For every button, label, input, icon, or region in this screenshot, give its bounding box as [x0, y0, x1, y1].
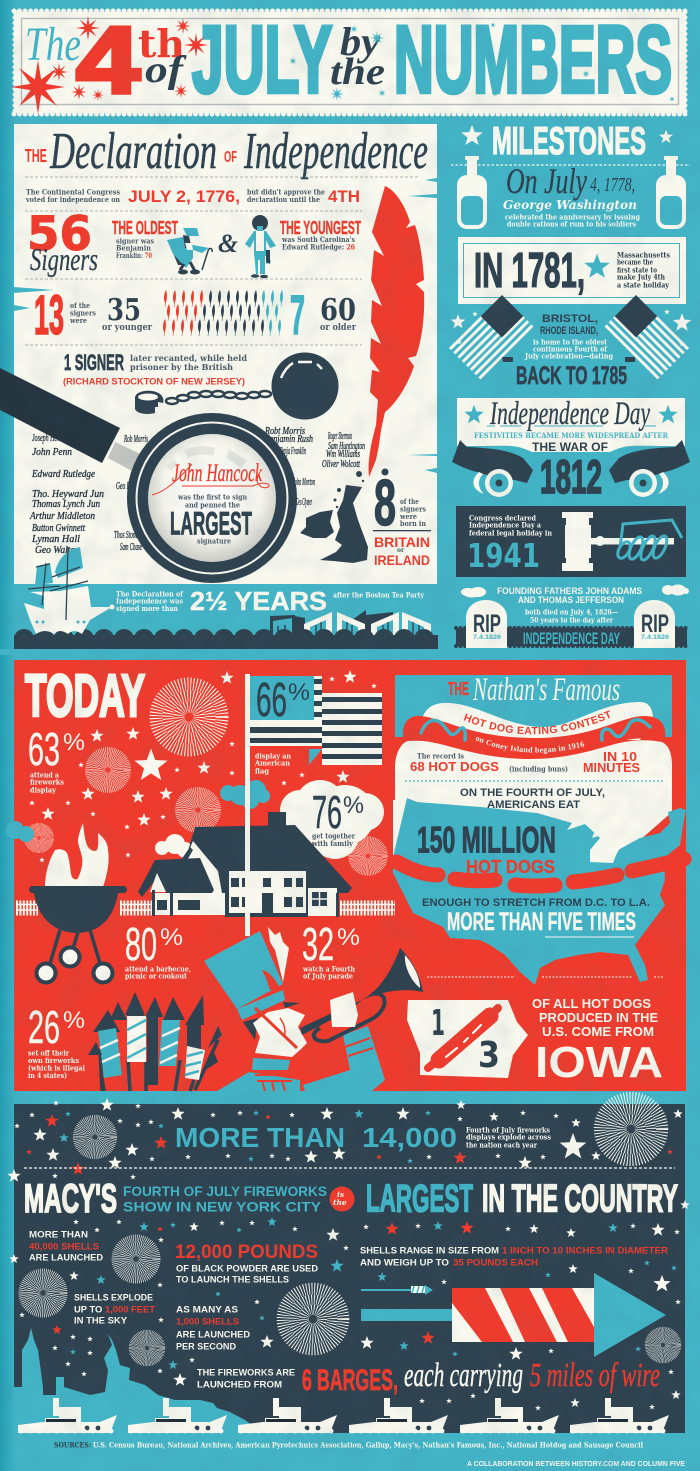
signature: john hancock: [152, 460, 269, 495]
stat: more than 14000: MORE THAN: [175, 1122, 345, 1153]
icon: american flag with 66 percent: display an: [255, 752, 291, 760]
milestone: war of 1812: 1812: [540, 450, 602, 503]
title: by: [340, 19, 380, 64]
milestone: adams and jefferson: [456, 584, 689, 648]
icon: tombstones: [466, 600, 675, 648]
milestone: 1941 legal holiday: [456, 506, 686, 577]
milestone: 1778 george washington: 4, 1778,: [590, 174, 635, 196]
header banner: [11, 7, 686, 114]
icon: ship: [24, 547, 114, 634]
text: 1 signer recanted: prisoner by the British: [130, 363, 233, 373]
dotted divider and record: 68 HOT DOGS: [410, 760, 499, 774]
text: the youngest: THE YOUNGEST: [280, 218, 361, 238]
text: americans eat: AMERICANS EAT: [487, 799, 580, 811]
text: iowa: IOWA: [535, 1038, 663, 1087]
text: barges: LAUNCHED FROM: [197, 1380, 282, 1390]
sources: U.S. Census Bureau, National Archives, American Pyrotechnics Association, Gallup, Macy's, Nathan's Famous, Inc., National Hotdog and Sausage Council: [93, 1440, 643, 1450]
stat: 32 percent parade: 32: [302, 918, 334, 970]
stat: 26 percent own fireworks: set off their: [28, 1048, 70, 1058]
signature: john hancock: John Hancock: [172, 460, 263, 487]
icon: cream cloud with 76 percent: %: [343, 792, 364, 819]
heading: declaration: THE: [25, 146, 47, 166]
icon: tombstones: RIP: [641, 610, 669, 638]
heading: declaration: Independence: [243, 123, 428, 180]
icon: american flag with 66 percent: [245, 674, 382, 936]
stat: 7 signers 60 or older: or older: [320, 323, 356, 333]
text: the oldest: [112, 218, 178, 260]
text: the youngest: was South Carolina's: [281, 235, 355, 244]
stat: 8 signers born in britain or ireland: or: [397, 547, 405, 554]
icon: american flag with 66 percent: American: [254, 758, 290, 768]
signatures: Geo Read: [116, 481, 139, 492]
text: continental congress: [25, 187, 360, 206]
milestone: war of 1812: THE WAR OF: [532, 440, 608, 454]
text: declaration signed: Independence was: [116, 596, 183, 606]
cream field and us map: [393, 740, 686, 985]
icon: american flag with 66 percent: %: [288, 679, 310, 706]
icon: american flag with 66 percent: flag: [255, 766, 270, 776]
text: enough to stretch: [422, 897, 650, 938]
icon: barbecue grill: [29, 823, 127, 982]
text: barges: THE FIREWORKS ARE: [197, 1368, 295, 1378]
text: barges: [197, 1357, 660, 1397]
text: barges: 6 BARGES,: [302, 1364, 398, 1397]
stat: more than 14000: displays explode across: [466, 1132, 551, 1142]
text: 1000 shells per second: ARE LAUNCHED: [176, 1330, 251, 1340]
text: the youngest: Edward Rutledge: 26: [282, 242, 355, 252]
signatures: Button Gwinnett: [32, 523, 85, 534]
text: founding fathers: 50 years to the day after: [530, 616, 614, 624]
waves: [0, 635, 438, 655]
milestone: 1778 george washington: George Washington: [503, 198, 637, 212]
milestone: bristol flags: RHODE ISLAND,: [540, 325, 598, 337]
signatures: [29, 426, 365, 556]
text: continental congress: voted for independence on: [25, 195, 120, 204]
signatures: Wm Williams: [326, 449, 360, 460]
icon: cannons: [452, 440, 690, 497]
waves: [260, 1433, 686, 1441]
text: first to sign: signature: [197, 536, 231, 546]
stat: 8 signers born in britain or ireland: IRELAND: [374, 552, 430, 568]
stat: 56 signers: 56: [27, 207, 92, 262]
text: founding fathers: AND THOMAS JEFFERSON: [518, 595, 624, 605]
text: 40000 shells: ARE LAUNCHED: [29, 1252, 104, 1262]
heading: macy's largest in the country: SHOW IN NEW YORK CITY: [123, 1198, 322, 1214]
text: 12000 pounds: [175, 1242, 319, 1284]
signatures: Thomas Lynch Jun: [32, 499, 100, 510]
milestone: 1778 george washington: double rations of rum to his soldiers: [507, 220, 636, 228]
text: declaration signed: after the Boston Tea Party: [333, 590, 425, 600]
text: 1000 shells per second: 1,000 SHELLS: [176, 1316, 239, 1326]
text: americans eat: [417, 787, 605, 860]
credit: A COLLABORATION BETWEEN HISTORY.COM AND COLUMN FIVE: [467, 1461, 685, 1468]
signatures: Roger Sherman: [328, 431, 352, 442]
heading: nathan's famous: Nathan's Famous: [472, 672, 620, 708]
icon: rockets: [88, 992, 222, 1091]
text: the oldest: THE OLDEST: [112, 218, 178, 238]
text: declaration signed: [116, 586, 425, 616]
heading: macy's largest in the country: LARGEST: [366, 1178, 473, 1220]
signatures: Tho. Heyward Jun: [32, 489, 104, 500]
signatures: Benja Franklin: [280, 446, 306, 457]
icon: ball and chain: [135, 352, 338, 420]
panel: nathan's famous: [393, 672, 692, 1087]
dotted divider and record: [405, 750, 665, 781]
banner: hot dog eating contest: on Coney Island began in 1916: [476, 737, 584, 754]
milestone: 1778 george washington: On July: [506, 161, 587, 201]
banner: hot dog eating contest: [403, 702, 666, 754]
title stars: [11, 16, 675, 114]
heading: nathan's famous: [448, 672, 620, 708]
text: shells explode: SHELLS EXPLODE: [74, 1292, 153, 1302]
stat: 13 signers 35 or younger: [34, 283, 152, 346]
text: americans eat: ON THE FOURTH OF JULY,: [460, 787, 605, 799]
stat: 8 signers born in britain or ireland: born in: [400, 519, 426, 528]
signatures: Thos Stone: [114, 530, 138, 541]
panel: today: [6, 660, 692, 1092]
text: first to sign: and penned the: [185, 500, 240, 510]
text: 1 signer recanted: 1 SIGNER: [64, 350, 124, 375]
signatures: Benja Rush: [122, 456, 146, 467]
milestone: bristol flags: [449, 295, 691, 390]
signatures: Rob Morris: [123, 434, 148, 445]
icon: cream cloud with 76 percent: 76: [312, 786, 342, 838]
stat: 13 signers 35 or younger: 35: [107, 293, 141, 328]
text: first to sign: LARGEST: [170, 506, 252, 542]
stat: 13 signers 35 or younger: or younger: [102, 323, 152, 333]
text: barges: each carrying: [404, 1357, 523, 1394]
signatures: Sam Huntington: [328, 441, 365, 452]
icon: benjamin franklin figure: [167, 228, 212, 274]
heading: macy's largest in the country: is: [337, 1190, 345, 1199]
stat: 8 signers born in britain or ireland: signers: [400, 504, 426, 514]
stat: 32 percent parade: %: [337, 924, 360, 951]
milestone: bristol flags: continuous Fourth of: [533, 344, 608, 354]
icon: house: [138, 812, 352, 917]
stat: 56 signers: Signers: [30, 241, 98, 277]
heading: declaration: OF: [224, 149, 237, 166]
sources: SOURCES:: [54, 1440, 91, 1450]
stat: 63 percent fireworks display: [28, 723, 85, 794]
icon: tombstones: 7.4.1826: [641, 635, 670, 641]
stat: 80 percent barbecue: 80: [125, 918, 157, 970]
icon: iowa state with 1 in 3 hot dog: 1: [431, 1003, 445, 1044]
text: 12000 pounds: TO LAUNCH THE SHELLS: [176, 1274, 289, 1284]
milestone: 1781 massachusetts: Massachusetts: [617, 250, 670, 260]
stat: 80 percent barbecue: attend a barbecue,: [125, 964, 191, 974]
icon: cream cloud with 76 percent: get together: [312, 832, 356, 840]
stat: 8 signers born in britain or ireland: were: [399, 512, 417, 521]
signatures: Sam Chase: [120, 542, 142, 553]
signatures: Joseph Hewes: [32, 433, 66, 444]
stars: [7, 1098, 690, 1410]
text: the oldest: Benjamin: [116, 244, 151, 252]
stat: more than 14000: [175, 1122, 551, 1153]
text: iowa: U.S. COME FROM: [542, 1025, 654, 1039]
milestone: 1941 legal holiday: Congress declared: [469, 514, 537, 522]
stat: 8 signers born in britain or ireland: 8: [374, 466, 396, 539]
title: the: [330, 51, 385, 93]
heading: nathan's famous: THE: [448, 679, 469, 699]
text: continental congress: but didn't approve the: [247, 188, 325, 196]
text: shell sizes: 35 POUNDS EACH: [453, 1258, 538, 1268]
stat: 13 signers 35 or younger: were: [69, 316, 87, 325]
dotted divider and record: The record is: [417, 752, 464, 760]
text: shell sizes: 1 INCH TO 10 INCHES IN DIAMETER: [502, 1246, 669, 1256]
text: enough to stretch: ENOUGH TO STRETCH FROM D.C. TO L.A.: [422, 897, 650, 909]
milestone: 1781 massachusetts: first state to: [617, 266, 657, 274]
icon: trumpet player: [204, 927, 423, 1091]
milestone: 1781 massachusetts: make July 4th: [617, 272, 665, 282]
signatures: Geo Walton: [35, 545, 80, 556]
milestone: war of 1812: FESTIVITIES BECAME MORE WIDESPREAD AFTER: [474, 431, 668, 440]
title: [25, 7, 672, 114]
text: shells explode: [74, 1292, 156, 1326]
stat: 26 percent own fireworks: in 4 states): [28, 1071, 67, 1080]
ampersand: &: [218, 229, 238, 258]
text: shells explode: UP TO 1,000 FEET: [74, 1304, 156, 1314]
icon: barges: [18, 1398, 669, 1433]
stat: 63 percent fireworks display: display: [30, 786, 57, 794]
icon: cream cloud with 76 percent: [278, 780, 384, 859]
stat: 26 percent own fireworks: %: [63, 1007, 85, 1034]
milestone: bristol flags: BACK TO 1785: [516, 362, 627, 390]
dotted divider and record: MINUTES: [583, 761, 640, 775]
text: 1000 shells per second: AS MANY AS: [176, 1304, 238, 1314]
text: 1000 shells per second: PER SECOND: [176, 1342, 236, 1352]
fireworks bursts: [23, 1098, 678, 1363]
icon: ink drops: [356, 468, 388, 477]
heading: macy's largest in the country: [24, 1177, 678, 1221]
icon: magnifying glass: [127, 413, 297, 583]
dotted divider and record: (including buns): [509, 764, 568, 774]
text: shells explode: IN THE SKY: [74, 1316, 127, 1326]
icon: iowa state with 1 in 3 hot dog: 3: [478, 1035, 500, 1076]
stat: 80 percent barbecue: [125, 918, 191, 980]
band: independence day ribbon: INDEPENDENCE DAY: [523, 630, 620, 648]
icon: harbor buildings: [270, 610, 431, 635]
text: the youngest: [280, 218, 361, 252]
band: independence day ribbon: [456, 628, 687, 648]
icon: small and large rockets: [361, 1273, 666, 1357]
icon: rum bottles: [457, 156, 686, 229]
icon: gavel and hand: [562, 512, 682, 571]
heading: macy's largest in the country: MACY'S: [24, 1177, 117, 1221]
text: 40000 shells: 40,000 SHELLS: [29, 1242, 99, 1252]
chart: quill pictogram of signers by age: [163, 290, 283, 336]
text: declaration signed: 2½ YEARS: [190, 586, 327, 616]
signatures: Arthur Middleton: [29, 511, 95, 522]
banner: hot dog eating contest: HOT DOG EATING CONTEST: [464, 710, 610, 734]
text: founding fathers: both died on July 4, 1826—: [525, 608, 618, 616]
text: the oldest: Franklin: 70: [116, 251, 152, 260]
text: continental congress: 4TH: [328, 187, 360, 206]
text: 40000 shells: MORE THAN: [29, 1230, 88, 1240]
milestone: 1778 george washington: [503, 161, 641, 228]
stat: 8 signers born in britain or ireland: of the: [400, 497, 419, 506]
text: shell sizes: SHELLS RANGE IN SIZE FROM: [360, 1246, 499, 1256]
title: 4: [76, 8, 140, 114]
stat: 13 signers 35 or younger: 13: [34, 283, 64, 346]
stat: 32 percent parade: of July parade: [303, 972, 353, 980]
signatures: Geo Clymer: [296, 497, 312, 508]
text: declaration signed: signed more than: [116, 604, 178, 613]
text: americans eat: 150 MILLION: [417, 820, 556, 860]
stat: 7 signers 60 or older: 7: [290, 283, 305, 346]
text: 12000 pounds: 12,000 POUNDS: [175, 1242, 318, 1263]
panel: declaration of independence: [0, 123, 437, 584]
icon: sausage chain: [397, 859, 684, 886]
milestone: 1941 legal holiday: federal legal holiday in: [469, 528, 552, 538]
milestone: bristol flags: July celebration—dating: [524, 352, 614, 360]
milestone: 1781 massachusetts: [458, 237, 686, 304]
text: 1 signer recanted: [63, 350, 247, 388]
milestone: 1781 massachusetts: became the: [617, 258, 653, 266]
icon: american flag with 66 percent: 66: [256, 674, 287, 727]
stat: 7 signers 60 or older: [290, 283, 356, 346]
stat: more than 14000: Fourth of July fireworks: [466, 1126, 550, 1134]
stat: 13 signers 35 or younger: signers: [70, 308, 96, 318]
stat: 8 signers born in britain or ireland: [373, 466, 431, 568]
text: 40000 shells: [29, 1230, 104, 1262]
icon: clouds: [461, 584, 689, 598]
dotted divider and record: IN 10: [603, 750, 637, 764]
stat: 26 percent own fireworks: own fireworks: [28, 1056, 79, 1065]
milestone: bristol flags: is home to the oldest: [533, 338, 607, 346]
signatures: Lyman Hall: [31, 534, 80, 545]
text: shell sizes: [360, 1246, 669, 1268]
stat: 26 percent own fireworks: [28, 1001, 85, 1080]
text: continental congress: The Continental Congress: [26, 188, 120, 196]
text: shell sizes: AND WEIGH UP TO: [360, 1258, 449, 1268]
heading: today: TODAY: [25, 663, 145, 729]
signatures: Edward Rutledge: [31, 469, 96, 480]
icon: iowa state with 1 in 3 hot dog: [407, 1000, 528, 1078]
text: iowa: [532, 997, 663, 1087]
text: iowa: OF ALL HOT DOGS: [532, 997, 651, 1011]
text: iowa: PRODUCED IN THE: [539, 1011, 658, 1025]
text: founding fathers: [497, 586, 642, 624]
icon: cream cloud with 76 percent: with family: [311, 839, 354, 848]
icon: tombstones: 7.4.1826: [473, 635, 502, 641]
panel: fireworks night sky: [7, 1098, 690, 1445]
icon: quill feather: [369, 186, 424, 477]
milestone: 1781 massachusetts: IN 1781,: [474, 244, 585, 298]
signatures: John Morton: [293, 477, 315, 488]
text: the oldest: signer was: [116, 236, 154, 246]
signatures: Benjamin Rush: [265, 434, 313, 445]
milestone: 1941 legal holiday: 1941: [467, 536, 540, 575]
stat: 32 percent parade: watch a Fourth: [302, 964, 355, 974]
text: 1 signer recanted: (RICHARD STOCKTON OF NEW JERSEY): [63, 376, 245, 388]
milestone: war of 1812: [452, 396, 690, 503]
milestone: 1781 massachusetts: a state holiday: [617, 280, 670, 290]
heading: declaration: Declaration: [49, 123, 217, 180]
band: boston tea party: [0, 547, 438, 655]
signatures: Robt Morris: [264, 426, 305, 437]
stat: 63 percent fireworks display: %: [63, 729, 85, 756]
title: of: [145, 49, 187, 91]
heading: declaration: [25, 123, 428, 180]
text: 1 signer recanted: later recanted, while held: [130, 354, 247, 364]
stat: 63 percent fireworks display: fireworks: [30, 778, 64, 786]
text: continental congress: declaration until the: [247, 195, 320, 204]
text: first to sign: was the first to sign: [177, 492, 247, 502]
heading: macy's largest in the country: FOURTH OF JULY FIREWORKS: [123, 1183, 327, 1199]
stars and fireworks background: [26, 670, 377, 862]
text: declaration signed: The Declaration of: [116, 590, 184, 598]
text: 12000 pounds: OF BLACK POWDER ARE USED: [176, 1264, 319, 1274]
icon: sleeve and magnifier handle: [0, 368, 145, 474]
map: britain and ireland: [300, 480, 368, 563]
icon: new york skyline: [14, 1328, 263, 1445]
teal cloud: [6, 780, 270, 842]
heading: macy's largest in the country: the: [333, 1198, 347, 1207]
stat: 13 signers 35 or younger: of the: [70, 301, 90, 310]
signatures: John Penn: [32, 447, 72, 458]
text: hot dogs: HOT DOGS: [466, 857, 555, 877]
text: founding fathers: FOUNDING FATHERS JOHN ADAMS: [497, 586, 642, 596]
text: first to sign: [170, 492, 252, 546]
stat: more than 14000: the nation each year: [466, 1140, 538, 1150]
title: JULY: [192, 7, 332, 113]
stat: 80 percent barbecue: %: [160, 924, 183, 951]
stat: 63 percent fireworks display: attend a: [30, 770, 59, 780]
text: 1000 shells per second: [176, 1304, 251, 1352]
icon: tombstones: RIP: [473, 610, 501, 638]
milestone: 1778 george washington: celebrated the anniversary by issuing: [505, 212, 641, 222]
stat: 26 percent own fireworks: (which is illegal: [28, 1064, 85, 1072]
icon: edward rutledge figure: [245, 215, 276, 278]
icon: fence: [16, 904, 395, 910]
stat: 63 percent fireworks display: 63: [28, 723, 60, 775]
stat: 26 percent own fireworks: 26: [28, 1001, 60, 1053]
milestone: bristol flags: BRISTOL,: [542, 313, 598, 325]
stat: more than 14000: 14,000: [362, 1122, 457, 1153]
text: continental congress: JULY 2, 1776,: [128, 187, 240, 206]
stat: 7 signers 60 or older: 60: [320, 293, 356, 328]
title: th: [138, 21, 185, 66]
signatures: Oliver Wolcott: [322, 459, 360, 470]
panel: milestones: [449, 120, 691, 648]
title: The: [25, 18, 81, 71]
milestone: 1941 legal holiday: Independence Day a: [469, 520, 541, 530]
stat: 8 signers born in britain or ireland: BRITAIN: [374, 534, 430, 550]
stat: 80 percent barbecue: picnic or cookout: [125, 972, 187, 980]
